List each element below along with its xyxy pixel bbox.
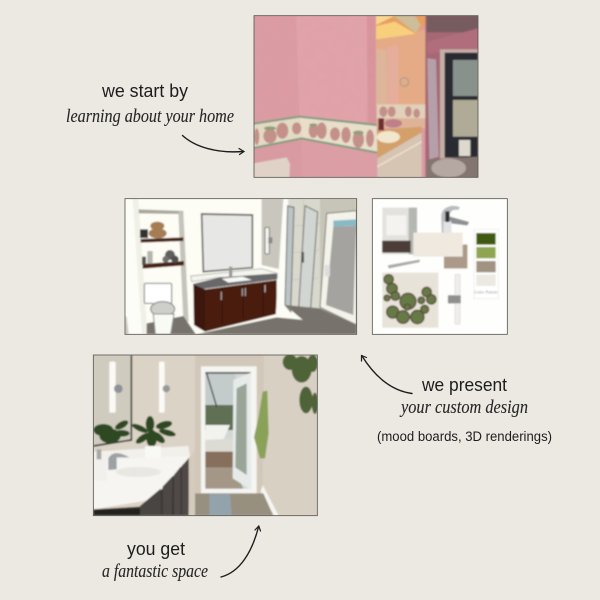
caption: you get: you get: [127, 538, 185, 559]
mood board: towel bar: [388, 260, 420, 268]
mood board: sconce: [448, 274, 461, 324]
mood board: tile samples: [413, 233, 467, 268]
rendering: 3D bathroom model: [124, 198, 358, 335]
photo: original pink bathroom: [250, 10, 483, 183]
mood board: faucet: [441, 206, 469, 237]
caption: we present: we present: [421, 374, 507, 395]
mood board: green wall art: [382, 273, 438, 328]
caption: we present: [377, 374, 552, 444]
mood board: [372, 199, 507, 334]
arrow: to design: [362, 356, 412, 394]
caption: we start by: learning about your home: [66, 106, 234, 127]
caption: we present: your custom design: [399, 397, 528, 418]
mood board: vanity photo: [382, 208, 417, 254]
caption: you get: [102, 538, 208, 582]
caption: we start by: we start by: [101, 80, 189, 101]
caption: you get: a fantastic space: [102, 561, 208, 582]
arrow: to original photo: [182, 136, 244, 154]
photo: finished bathroom: [90, 350, 323, 520]
caption: we present: (mood boards, 3D renderings): [377, 429, 552, 444]
arrow: to finished photo: [221, 526, 260, 577]
caption: we start by: [66, 80, 234, 127]
mood board: colour palette: Color Palette: [474, 289, 498, 294]
